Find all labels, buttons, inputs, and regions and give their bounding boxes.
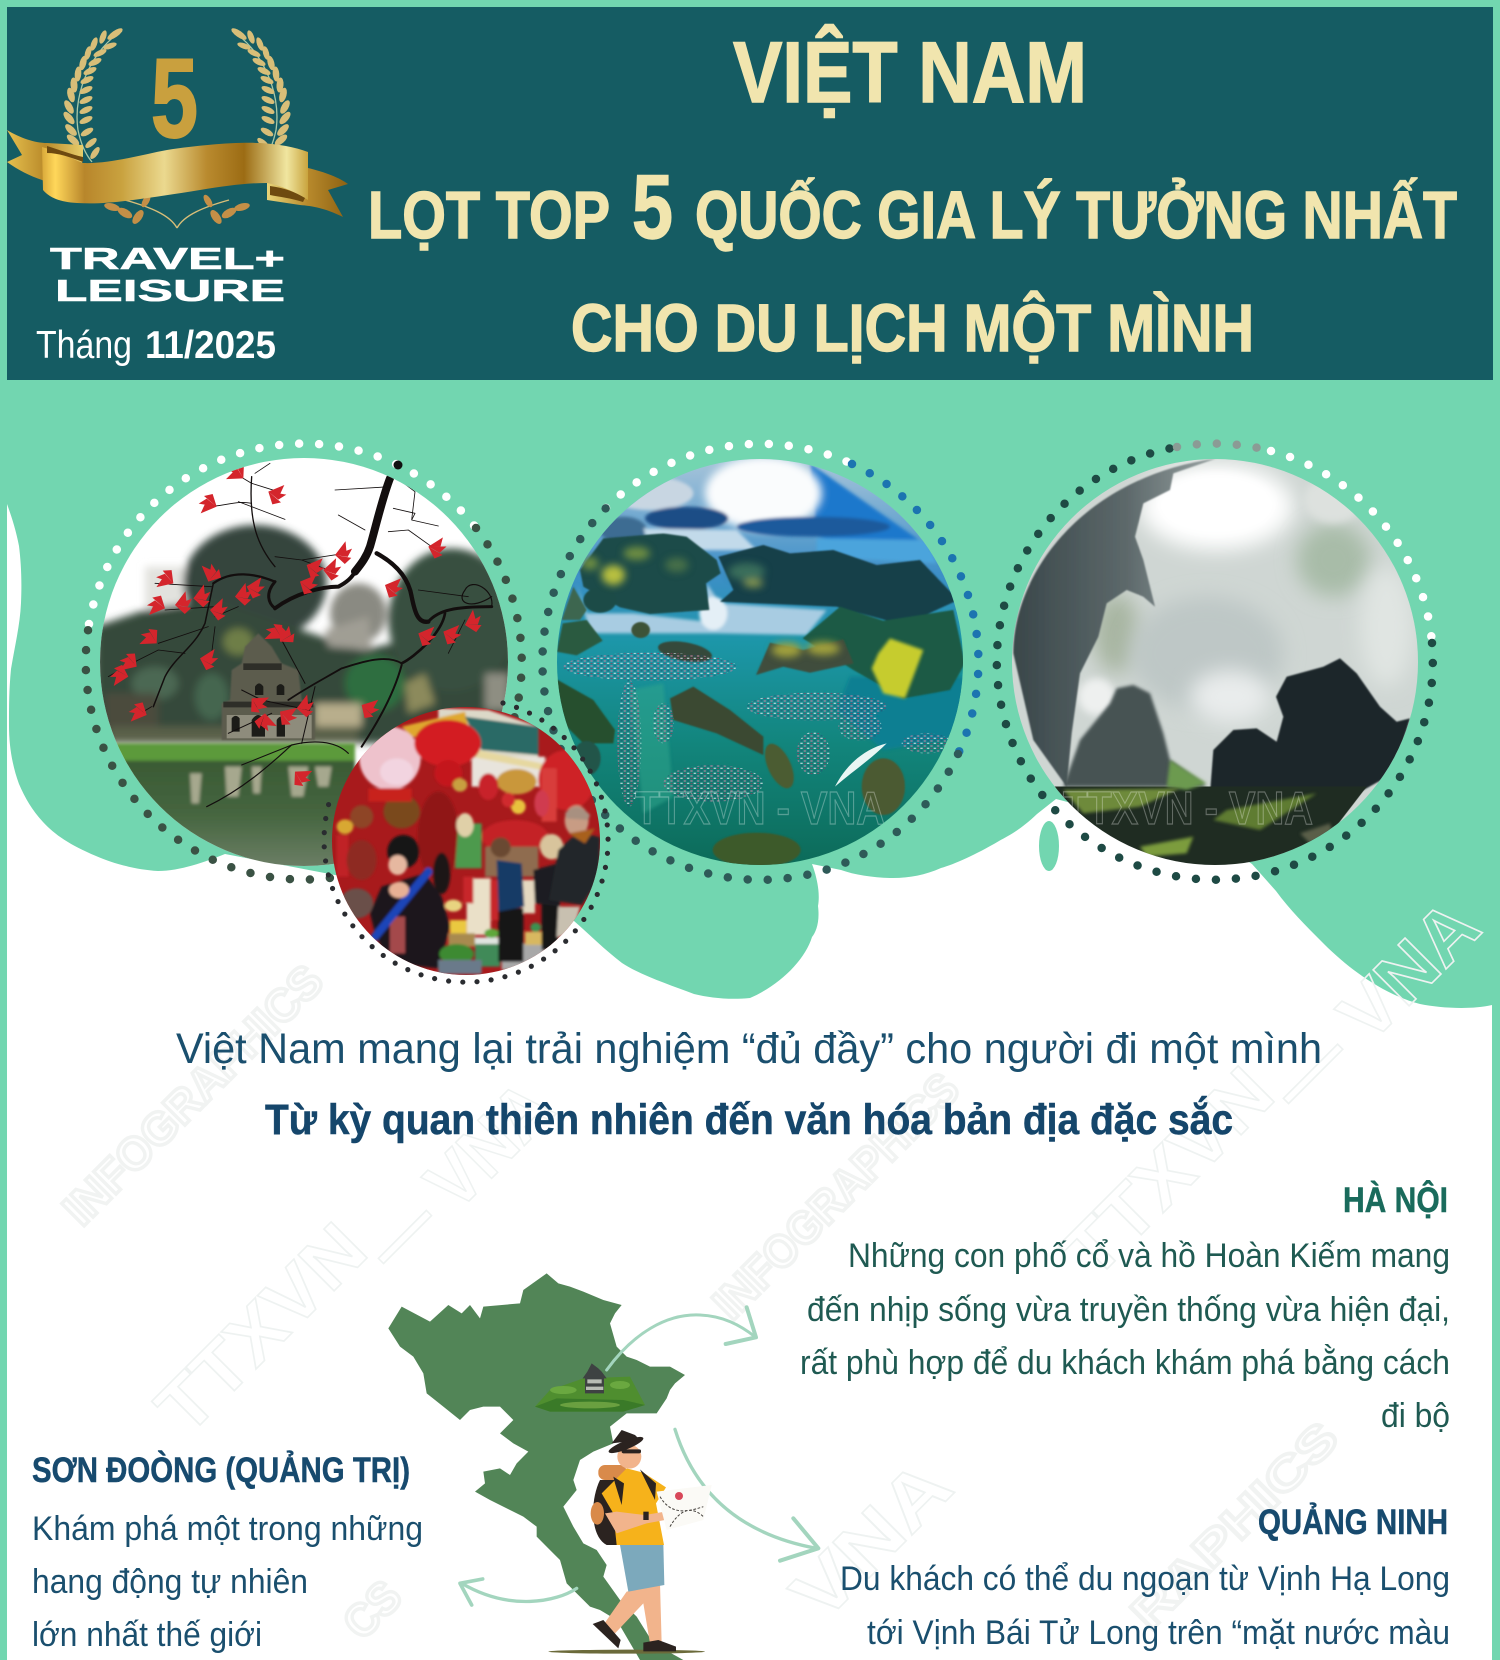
text block: Sơn Đoòng: Khám phá một trong những <box>32 1510 423 1548</box>
title: VIỆT NAM <box>733 25 1087 121</box>
text block: Hà Nội: đi bộ <box>1381 1397 1450 1435</box>
panel: header banner <box>7 7 1493 380</box>
dotted ring: photo 3 <box>997 444 1433 880</box>
watermarks: TTXVN <box>140 1207 382 1449</box>
text block: Quảng Ninh <box>840 1502 1450 1652</box>
arrow: to Hà Nội <box>607 1307 756 1370</box>
dotted ring: photo 1 <box>86 444 522 880</box>
title: 5 <box>632 157 673 258</box>
text block: Hà Nội <box>800 1180 1450 1435</box>
watermarks: — VNA <box>348 1065 569 1286</box>
watermarks: INFOGRAPHICS <box>52 954 333 1235</box>
icon: laurel wreath <box>61 26 293 228</box>
photo: Tet market street <box>330 705 602 977</box>
date label: Tháng <box>36 324 132 367</box>
intro text: Việt Nam mang lại trải nghiệm “đủ đầy” cho người đi một mình <box>176 1025 1322 1073</box>
text block: Sơn Đoòng: hang động tự nhiên <box>32 1563 308 1601</box>
date label <box>36 324 276 367</box>
watermarks: INFOGRAPHICS <box>702 1062 969 1329</box>
text block: Hà Nội: Những con phố cổ và hồ Hoàn Kiếm mang <box>848 1237 1450 1275</box>
number 5 in wreath: 5 <box>151 36 198 161</box>
text block: Hà Nội: HÀ NỘI <box>1343 1180 1448 1220</box>
text block: Sơn Đoòng: lớn nhất thế giới <box>32 1616 262 1654</box>
dotted ring: market photo <box>324 703 608 982</box>
icon: Turtle Tower island <box>535 1363 645 1412</box>
arrow: to Sơn Đoòng <box>460 1579 577 1605</box>
arrow: to Quảng Ninh <box>675 1429 818 1561</box>
photo: Son Doong cave: TTXVN - VNA <box>1063 782 1313 834</box>
icon: gold ribbon <box>7 130 348 217</box>
watermarks <box>52 884 1495 1649</box>
watermarks: TTXVN <box>1047 1051 1289 1293</box>
logo: Travel + Leisure: TRAVEL+ <box>50 241 285 276</box>
text block: Quảng Ninh: tới Vịnh Bái Tử Long trên “mặt nước màu <box>867 1614 1450 1652</box>
title: LỌT TOP <box>368 178 610 253</box>
watermarks: VNA <box>775 1443 968 1636</box>
text block: Hà Nội: đến nhịp sống vừa truyền thống vừa hiện đại, <box>807 1291 1450 1329</box>
text block: Sơn Đoòng <box>32 1450 423 1654</box>
text block: Sơn Đoòng: SƠN ĐOÒNG (QUẢNG TRỊ) <box>32 1450 410 1490</box>
map of Vietnam with hiker <box>388 1273 818 1660</box>
icon: mint water drop <box>1039 821 1059 871</box>
photo: Son Doong cave <box>1010 458 1420 873</box>
logo: Travel + Leisure <box>50 241 285 308</box>
text block: Quảng Ninh: QUẢNG NINH <box>1258 1502 1448 1542</box>
watermarks: — VNA <box>1253 884 1495 1126</box>
photo: Ha Long bay: TTXVN - VNA <box>635 782 885 834</box>
watermarks: RAPHICS <box>1120 1411 1348 1639</box>
title <box>368 25 1457 366</box>
watermarks: CS <box>332 1570 411 1649</box>
map: northern Vietnam <box>388 1273 685 1660</box>
text block: Quảng Ninh: Du khách có thể du ngoạn từ Vịnh Hạ Long <box>840 1560 1450 1598</box>
intro text: Từ kỳ quan thiên nhiên đến văn hóa bản địa đặc sắc <box>265 1095 1233 1144</box>
intro text <box>176 1025 1322 1144</box>
logo: Travel + Leisure: LEISURE <box>55 273 285 308</box>
dotted ring: photo 2 <box>542 444 978 880</box>
icon: hiker with map <box>548 1430 712 1654</box>
text block: Hà Nội: rất phù hợp để du khách khám phá bằng cách <box>800 1344 1450 1382</box>
photo: Hoan Kiem lake and Turtle Tower <box>95 458 515 870</box>
date label: 11/2025 <box>145 324 276 367</box>
title: CHO DU LỊCH MỘT MÌNH <box>571 291 1254 366</box>
photo: Ha Long bay <box>555 457 965 868</box>
